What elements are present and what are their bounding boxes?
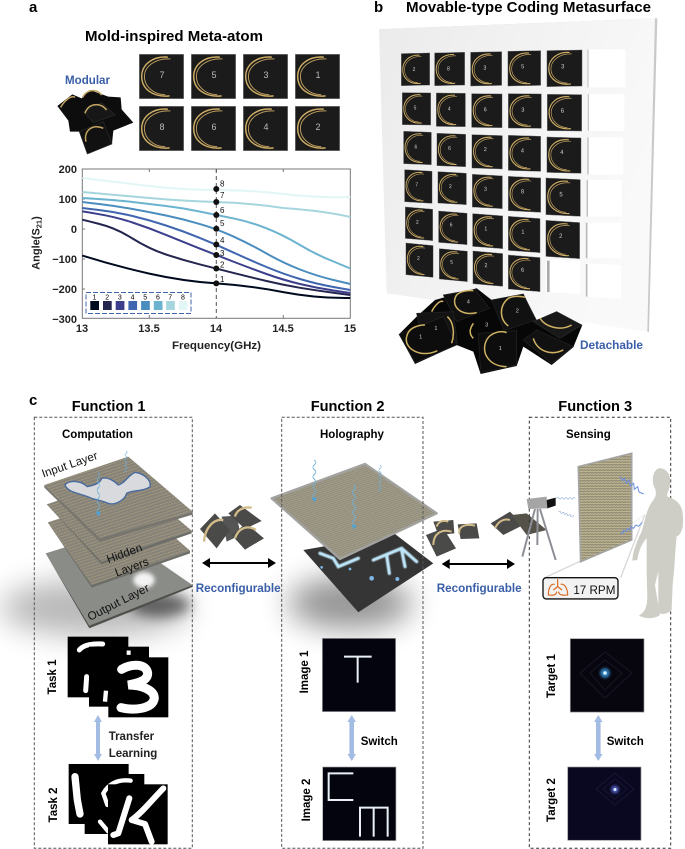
metasurface frame with tiles: 5 [521, 64, 524, 70]
chart legend: 8 [181, 294, 185, 302]
icon: pile of modular atoms [57, 90, 133, 154]
layered diffractive network: Layers [113, 555, 151, 579]
atoms group [200, 505, 264, 550]
meta-atom tile 1: 1 [315, 70, 321, 80]
dashed box [282, 417, 423, 848]
metasurface frame with tiles: 3 [483, 65, 486, 72]
icon: lungs [548, 579, 568, 595]
target 2 heatmap [568, 767, 641, 840]
dashed box [34, 417, 192, 848]
image 2 label: Image 2 [301, 779, 313, 821]
metasurface frame with tiles: 1 [521, 229, 524, 236]
line chart: angle vs frequency: 5 [220, 219, 225, 228]
layered diffractive network: Hidden [105, 541, 144, 566]
line chart: angle vs frequency: 8 [220, 180, 225, 188]
label: reconfigurable: Reconfigurable [437, 581, 522, 595]
panel label c: c [29, 392, 37, 409]
panel c function 3 [522, 399, 683, 848]
meta-atom tile 4 [243, 106, 288, 151]
metasurface frame with tiles: 6 [484, 107, 487, 113]
line chart: angle vs frequency: 1 [220, 275, 225, 284]
metasurface frame with tiles: 6 [561, 107, 565, 115]
meta-atom tile 3 [243, 54, 288, 99]
detached atom pile [399, 288, 582, 374]
metasurface frame with tiles: 4 [560, 150, 564, 156]
metasurface frame with tiles: 2 [417, 256, 420, 262]
detached atom pile: 4 [467, 299, 470, 305]
detached atom pile: 3 [485, 323, 488, 329]
meta-atom tile 5 [191, 54, 236, 99]
panel c function 2 [272, 399, 437, 848]
metasurface frame with tiles: 3 [521, 108, 524, 114]
task 1 label: Task 1 [47, 659, 59, 694]
label: detachable: Detachable [580, 338, 643, 352]
line chart: angle vs frequency: 3 [220, 249, 225, 258]
target 2 label: Target 2 [546, 778, 558, 822]
hologram and metasurface [272, 460, 437, 612]
title: mold-inspired meta-atom: Mold-inspired Meta-atom [85, 29, 263, 45]
dashed box [529, 417, 671, 848]
metasurface frame with tiles: 1 [484, 226, 487, 233]
detached atom pile: 2 [516, 308, 519, 314]
respiration callout [543, 578, 618, 599]
line chart: angle vs frequency: 21 [34, 220, 44, 228]
image 1: letter T [322, 638, 396, 712]
line chart: angle vs frequency: 0 [71, 224, 77, 236]
image 2: letters CM [323, 767, 396, 841]
metasurface frame with tiles: 6 [521, 268, 524, 274]
metasurface frame with tiles: 2 [559, 234, 563, 240]
image 1 label: Image 1 [299, 650, 311, 693]
title: movable-type coding metasurface: Movable-type Coding Metasurface [406, 0, 651, 16]
label: reconfigurable: Reconfigurable [196, 581, 281, 595]
metasurface frame with tiles: 2 [413, 67, 415, 73]
line chart: angle vs frequency: −100 [52, 254, 77, 266]
heading: function 3: Function 3 [558, 399, 632, 415]
metasurface frame with tiles: 7 [415, 182, 418, 189]
meta-atom tile 6 [191, 106, 236, 151]
label: transfer learning: Learning [109, 748, 157, 760]
label: switch: Switch [361, 736, 398, 748]
label: holography: Holography [320, 429, 384, 441]
line chart: angle vs frequency: 2 [220, 260, 225, 270]
metasurface frame with tiles: 3 [484, 186, 487, 193]
task 2 digit stack [69, 764, 168, 844]
task 1 digit stack [68, 637, 168, 717]
metasurface frame with tiles: 5 [559, 191, 563, 198]
sensing scene [522, 453, 683, 618]
line chart: angle vs frequency: 6 [220, 206, 225, 215]
panel c function 1 [34, 399, 193, 848]
chart legend: 4 [131, 294, 135, 302]
line chart: angle vs frequency: ) [30, 216, 42, 220]
label: modular: Modular [65, 75, 111, 87]
line chart: angle vs frequency: Frequency(GHz) [172, 340, 261, 352]
metasurface frame with tiles: 6 [448, 146, 451, 152]
panel a: meta-atom [30, 29, 356, 352]
line chart: angle vs frequency: 14.5 [272, 323, 294, 335]
line chart: angle vs frequency: Angle(S [30, 228, 42, 270]
double arrow: switch [347, 715, 356, 761]
label: sensing: Sensing [566, 429, 611, 441]
detached atom pile: 1 [419, 334, 422, 340]
reconfigurable connector 1 [196, 505, 281, 595]
line chart: angle vs frequency: 15 [344, 323, 356, 335]
meta-atom tile 8 [139, 106, 184, 151]
reconfigurable connector 2 [426, 512, 547, 595]
line chart: angle vs frequency: 4 [220, 236, 225, 245]
chart legend: 5 [143, 294, 147, 302]
layered diffractive network: Input Layer [40, 449, 100, 480]
metasurface frame with tiles: 4 [448, 106, 451, 113]
metasurface frame with tiles: 2 [484, 147, 487, 153]
chart legend: 6 [156, 294, 160, 302]
metasurface frame with tiles: 6 [414, 144, 417, 151]
metasurface frame with tiles: 5 [414, 105, 416, 112]
meta-atom tile 7 [139, 54, 184, 99]
line chart: angle vs frequency: 13.5 [138, 323, 160, 335]
meta-atom tile 3: 3 [263, 70, 269, 80]
line chart: angle vs frequency: 100 [59, 194, 77, 206]
layered diffractive network: Output Layer [85, 581, 152, 624]
task 2 label: Task 2 [48, 788, 60, 822]
heading: function 2: Function 2 [311, 399, 384, 415]
line chart: angle vs frequency [30, 164, 356, 352]
label: switch: Switch [607, 736, 644, 748]
shadows under layers [0, 577, 412, 636]
meta-atom tile 6: 6 [211, 122, 217, 132]
metasurface frame with tiles: 2 [449, 184, 452, 190]
metasurface frame with tiles: 8 [521, 189, 524, 196]
line chart: angle vs frequency: 13 [76, 323, 88, 335]
meta-atom tile 8: 8 [159, 122, 165, 132]
detached atom pile: 1 [499, 346, 502, 352]
atoms group [426, 512, 547, 557]
heading: function 1: Function 1 [72, 399, 145, 415]
meta-atom tile 1 [295, 54, 340, 99]
chart legend: 3 [118, 294, 122, 302]
meta-atom tile 2: 2 [315, 122, 321, 132]
metasurface frame with tiles: 5 [450, 259, 453, 266]
detached atom pile: 1 [434, 326, 438, 332]
line chart: angle vs frequency: −200 [52, 284, 77, 296]
label: computation: Computation [62, 429, 133, 441]
target 1 heatmap [570, 639, 644, 712]
line chart: angle vs frequency: 200 [59, 164, 77, 176]
label: transfer learning: Transfer [109, 731, 155, 743]
chart legend: 2 [105, 294, 109, 302]
meta-atom tile 4: 4 [263, 122, 269, 132]
metasurface frame with tiles: 4 [521, 148, 525, 155]
meta-atom tile 5: 5 [211, 70, 217, 80]
metasurface frame with tiles: 3 [561, 63, 565, 70]
chart legend: 1 [92, 294, 96, 302]
panel b: metasurface [379, 0, 657, 374]
metasurface frame with tiles: 2 [485, 263, 487, 269]
double arrow [202, 558, 276, 568]
respiration callout: 17 RPM [573, 584, 615, 597]
double arrow [442, 559, 515, 569]
line chart: angle vs frequency: 14 [210, 323, 223, 335]
target 1 label: Target 1 [546, 653, 558, 698]
meta-atom tile 2 [295, 106, 340, 151]
layered diffractive network [40, 449, 193, 628]
double arrow: transfer learning [94, 715, 102, 761]
metasurface frame with tiles: 2 [416, 219, 419, 226]
metasurface frame with tiles: 6 [450, 222, 453, 229]
chart legend: 7 [168, 294, 172, 302]
line chart: angle vs frequency: −300 [52, 314, 77, 326]
chart legend [86, 292, 191, 314]
metasurface frame with tiles [379, 18, 657, 332]
line chart: angle vs frequency: 7 [220, 191, 225, 200]
double arrow: switch [594, 715, 603, 761]
metasurface frame with tiles: 8 [447, 66, 450, 72]
meta-atom tile 7: 7 [159, 70, 165, 80]
